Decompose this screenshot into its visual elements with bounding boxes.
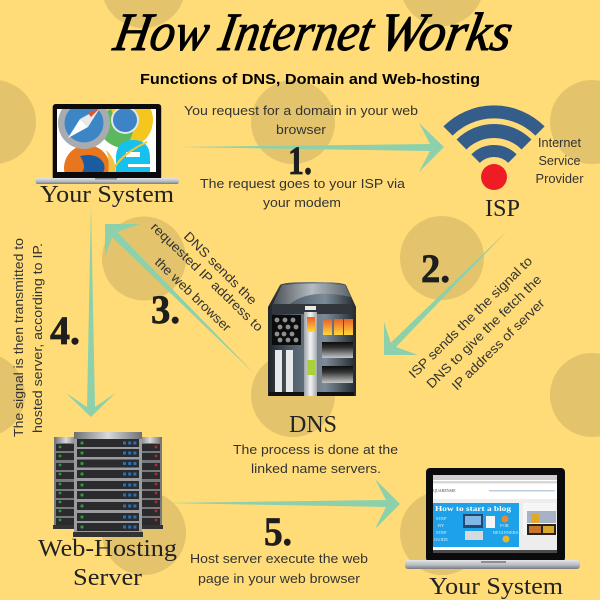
text: internet service provider: Service (538, 154, 581, 168)
blog banner: FOR (500, 523, 509, 528)
text: step 4 rotated: The signal is then transmitted to (11, 238, 26, 437)
text: step 3 rotated: the web browser (152, 254, 235, 335)
icon: web hosting server racks (53, 432, 163, 537)
text: step 1 request: You request for a domain in your web (184, 103, 418, 118)
icon: firefox logo (64, 146, 116, 172)
label: DNS: DNS (289, 411, 337, 438)
icon: laptop showing web page: QUARENSIE (433, 488, 456, 493)
title (109, 2, 517, 62)
number 3: 3. (151, 287, 180, 332)
text: step 2 rotated: IP address of server (449, 295, 548, 393)
blog banner: STEP (436, 530, 447, 535)
text: name servers: linked name servers. (251, 461, 381, 476)
text: step 4 rotated: hosted server, according to IP. (30, 243, 45, 433)
label: your system: Your System (40, 181, 174, 208)
blog banner: How to start a blog (435, 505, 512, 513)
number 2: 2. (421, 246, 450, 291)
arrow 3: DNS to your system (105, 224, 256, 375)
text: name servers (233, 442, 398, 476)
text: step 1 modem: your modem (263, 195, 341, 210)
icon: internet explorer logo (113, 140, 150, 172)
dot panel (272, 315, 301, 345)
text: internet service provider: Provider (536, 172, 584, 186)
title: Internet (214, 2, 380, 62)
text: step 2 rotated: DNS to give the fetch the (423, 272, 544, 391)
text: step 1 modem: The request goes to your ISP via (200, 176, 406, 191)
number 1: 1. (288, 138, 312, 183)
title: How (109, 2, 214, 62)
icon: safari logo (58, 109, 110, 149)
text: step 1 request (184, 103, 418, 137)
text: internet service provider: Internet (538, 136, 582, 150)
text: step 5: page in your web browser (198, 571, 361, 586)
icon: laptop with browser logos (36, 104, 179, 184)
text: step 3 rotated: requested IP address to (148, 219, 266, 334)
text: step 5: Host server execute the web (190, 551, 368, 566)
arrow 5: web server to your system (165, 479, 400, 529)
blog banner: BY (438, 523, 445, 528)
icon: laptop showing web page (405, 468, 580, 569)
text: step 2 rotated: ISP sends the the signal to (406, 253, 535, 381)
text: step 1 modem (200, 176, 406, 210)
blog banner: STEP (436, 516, 447, 521)
label: web-hosting server: Web-Hosting (38, 535, 177, 562)
icon: chrome logo (104, 109, 153, 148)
icon: wifi signal (448, 112, 540, 190)
label: web-hosting server: Server (73, 564, 142, 591)
right rack (138, 437, 163, 529)
text: step 5 (190, 551, 368, 586)
blog banner: BEGINNERS (493, 530, 519, 535)
icon: DNS server (268, 282, 356, 396)
center rack (73, 432, 143, 537)
label: your system bottom: Your System (429, 573, 563, 600)
blog banner: GUIDE (434, 537, 448, 542)
title: Works (375, 2, 517, 62)
text: step 4 rotated (11, 238, 45, 437)
subtitle: Functions of DNS, Domain and Web-hosting (140, 71, 480, 88)
text: internet service provider (536, 136, 584, 186)
text: step 3 rotated: DNS sends the (181, 229, 260, 308)
label: ISP: ISP (485, 195, 520, 222)
number 5: 5. (264, 509, 292, 554)
left rack (53, 437, 79, 529)
arrow 2: ISP to DNS (384, 230, 508, 355)
number 4: 4. (50, 308, 80, 353)
blog banner (433, 503, 519, 547)
text: step 1 request: browser (276, 122, 327, 137)
arrow 4: your system to web server (66, 205, 116, 417)
arrow 1: your system to ISP (178, 123, 444, 172)
sidebar ad (523, 503, 556, 535)
label: web-hosting server (38, 535, 177, 591)
text: name servers: The process is done at the (233, 442, 398, 457)
